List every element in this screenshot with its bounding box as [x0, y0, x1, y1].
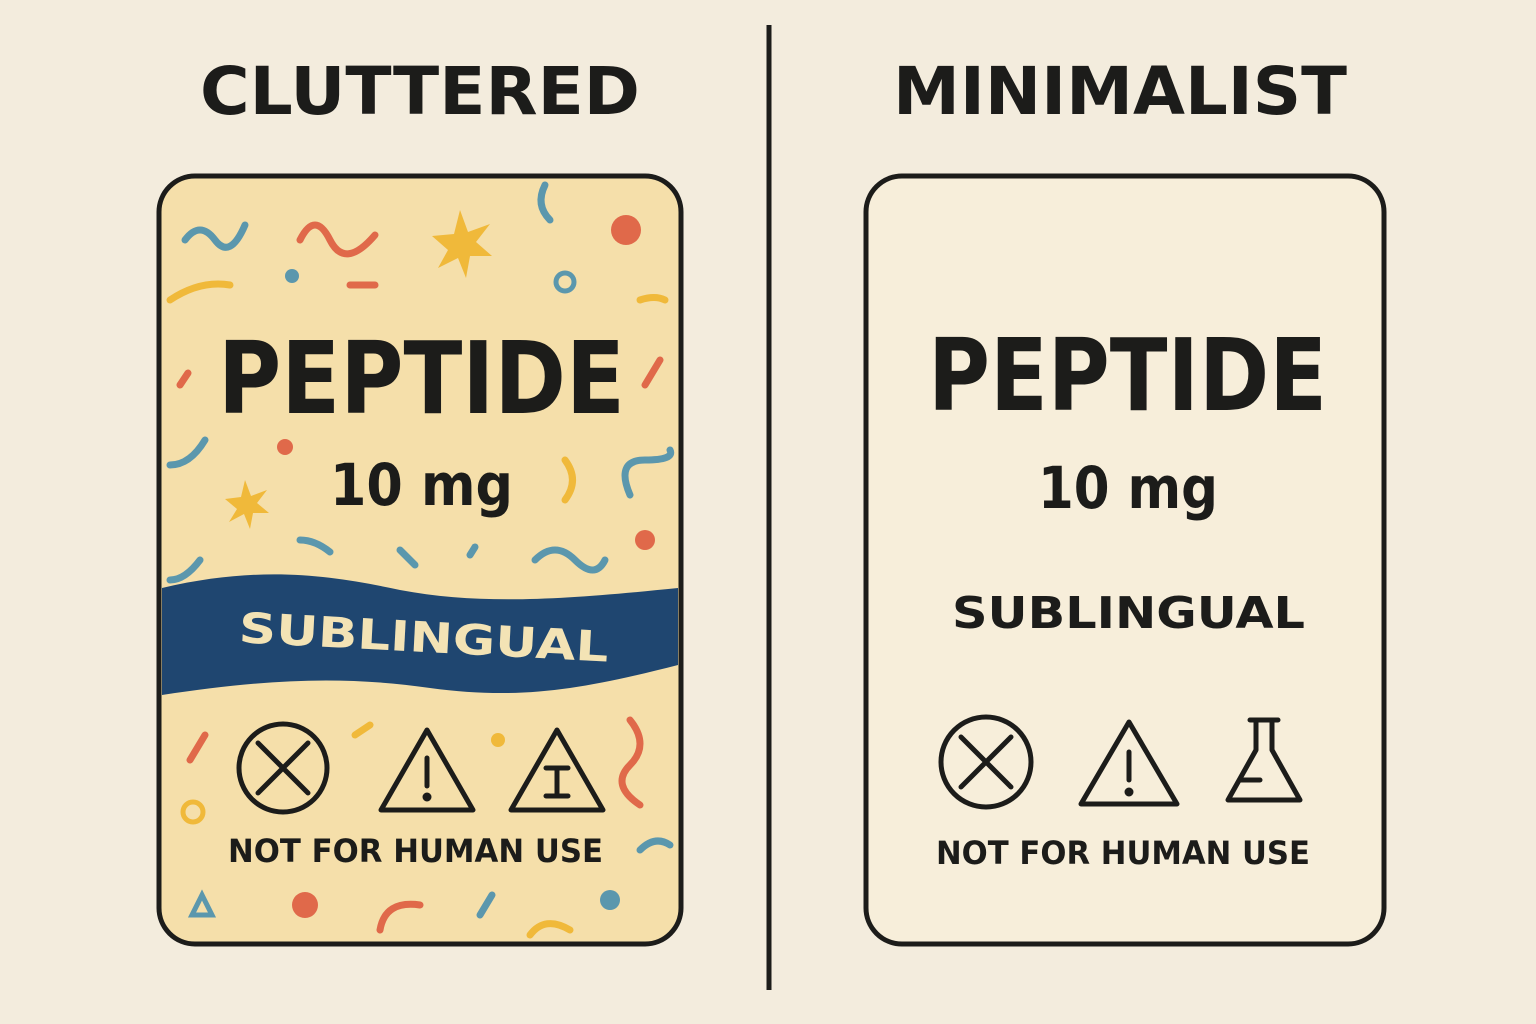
text: warning minimalist: NOT FOR HUMAN USE — [936, 834, 1310, 872]
icons cluttered — [239, 724, 603, 812]
text: dose minimalist: 10 mg — [1038, 454, 1218, 522]
text: dose cluttered: 10 mg — [330, 451, 513, 519]
title: cluttered: CLUTTERED — [200, 53, 640, 130]
title: minimalist: MINIMALIST — [893, 53, 1347, 130]
decorations — [170, 185, 671, 935]
text: sublingual minimalist: SUBLINGUAL — [952, 588, 1305, 639]
heading: peptide cluttered: PEPTIDE — [218, 320, 625, 437]
band: sublingual — [162, 574, 678, 695]
panel: minimalist label — [866, 176, 1384, 944]
icons minimalist — [941, 717, 1300, 807]
heading: peptide minimalist: PEPTIDE — [928, 317, 1327, 434]
band: sublingual: SUBLINGUAL — [238, 603, 610, 672]
text: warning cluttered: NOT FOR HUMAN USE — [228, 832, 603, 870]
panel: cluttered label — [159, 176, 681, 944]
